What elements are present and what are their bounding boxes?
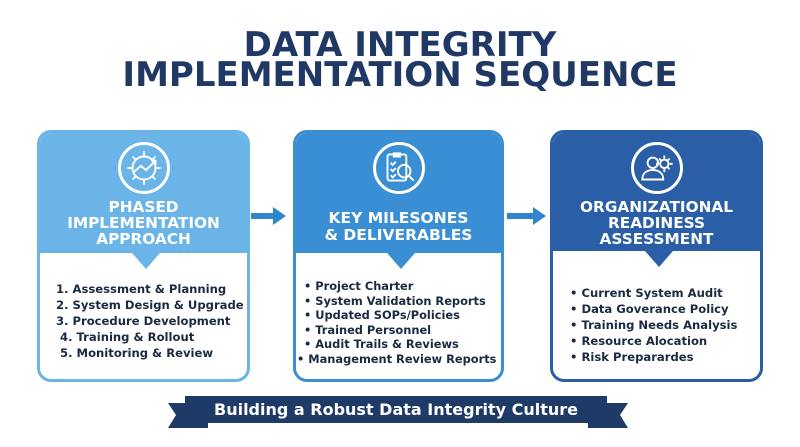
list: • Resource Alocation (570, 334, 707, 348)
banner: Building a Robust Data Integrity Culture (214, 400, 578, 419)
list: • Data Goverance Policy (570, 302, 729, 316)
arrow 1 (251, 207, 286, 225)
list (570, 286, 737, 364)
list: • Trained Personnel (304, 323, 431, 337)
list: 2. System Design & Upgrade (56, 298, 244, 312)
panel: organizational readiness (550, 130, 763, 382)
list: 4. Training & Rollout (60, 330, 194, 344)
header band (40, 133, 247, 253)
title (122, 25, 678, 95)
list: • Audit Trails & Reviews (304, 337, 459, 351)
list (56, 282, 244, 360)
heading: KEY MILESONES (329, 209, 468, 227)
list: • System Validation Reports (304, 294, 486, 308)
heading: PHASED (108, 198, 179, 216)
list (297, 279, 496, 366)
heading: ASSESSMENT (600, 230, 713, 248)
panel: key milestones (293, 130, 504, 382)
icon: gear with trend (118, 142, 170, 194)
panel: phased implementation approach (37, 130, 250, 382)
title: DATA INTEGRITY (244, 25, 556, 65)
heading: READINESS (608, 214, 705, 232)
heading: IMPLEMENTATION (67, 214, 220, 232)
list: 5. Monitoring & Review (60, 346, 213, 360)
banner (168, 396, 628, 428)
heading: ORGANIZATIONAL (580, 198, 733, 216)
heading (324, 209, 472, 244)
list: • Updated SOPs/Policies (304, 308, 460, 322)
heading: APPROACH (96, 230, 191, 248)
list: 3. Procedure Development (56, 314, 230, 328)
list: • Project Charter (304, 279, 413, 293)
title: IMPLEMENTATION SEQUENCE (122, 55, 678, 95)
list: • Current System Audit (570, 286, 723, 300)
heading (580, 198, 733, 248)
list: • Training Needs Analysis (570, 318, 737, 332)
arrow 2 (507, 207, 546, 225)
list: 1. Assessment & Planning (56, 282, 226, 296)
heading (67, 198, 220, 248)
list: • Risk Preparardes (570, 350, 694, 364)
icon: checklist with magnifier (373, 142, 425, 194)
heading: & DELIVERABLES (324, 226, 472, 244)
list: • Management Review Reports (297, 352, 496, 366)
icon: person with gear (631, 142, 683, 194)
